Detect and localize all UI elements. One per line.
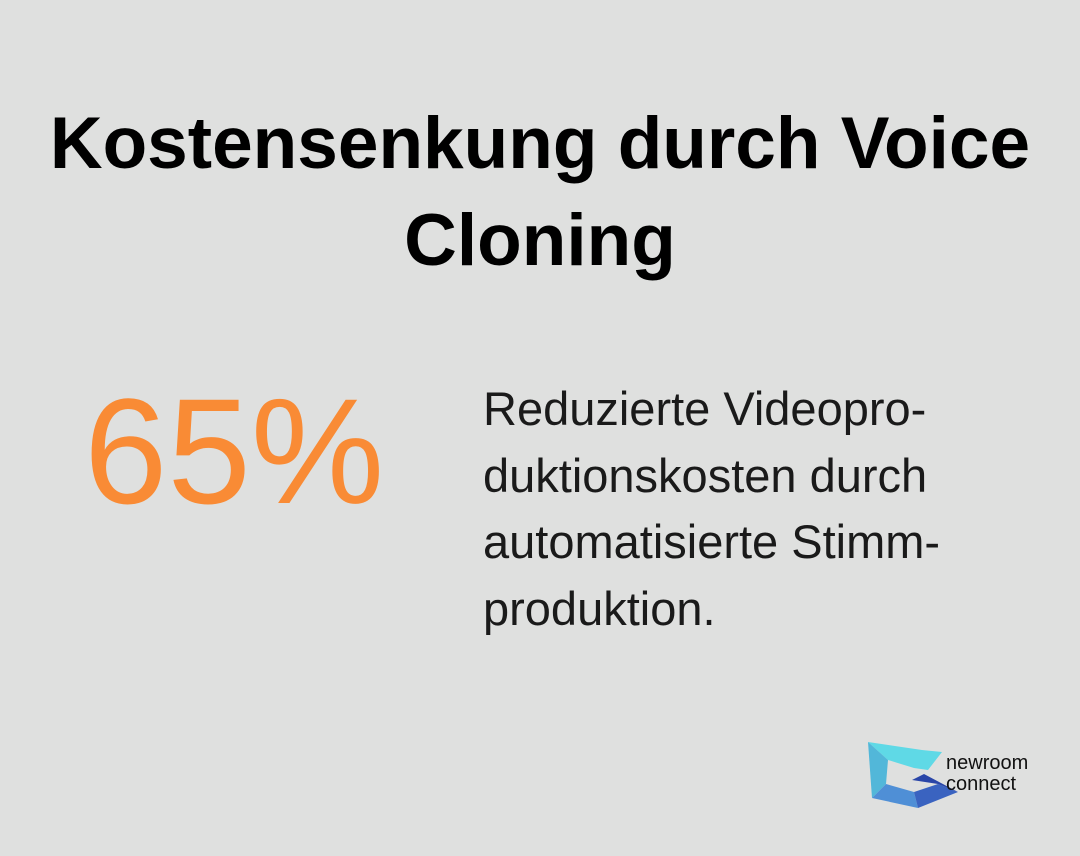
logo: newroom	[946, 752, 1028, 774]
description	[483, 382, 940, 635]
description: automatisierte Stimm-	[483, 515, 940, 568]
logo	[868, 742, 1028, 808]
title: Kostensenkung durch Voice	[50, 103, 1030, 184]
description: duktionskosten durch	[483, 448, 927, 502]
logo: connect	[946, 773, 1016, 795]
title: Cloning	[404, 200, 676, 281]
big number: 65%	[84, 367, 384, 535]
description: Reduzierte Videopro-	[483, 382, 926, 435]
description: produktion.	[483, 582, 716, 634]
title	[50, 103, 1030, 281]
